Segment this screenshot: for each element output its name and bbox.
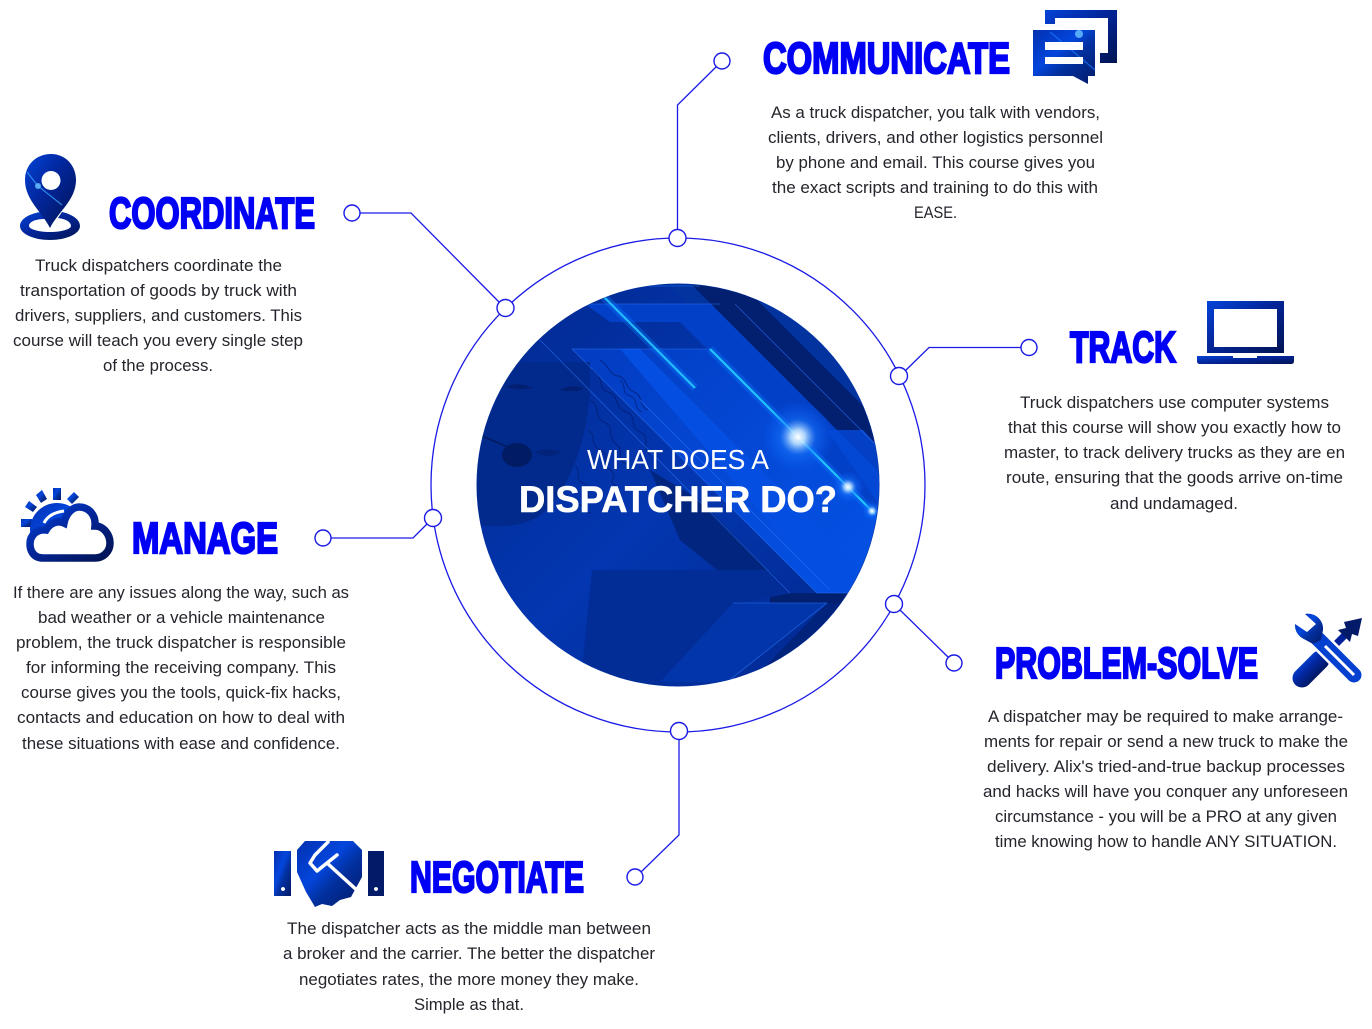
- panel: manage: [13, 488, 349, 753]
- text: manage: [13, 584, 349, 753]
- text: coordinate: drivers, suppliers, and customers. This: [15, 307, 302, 325]
- outer ring: [431, 238, 925, 732]
- icon: laptop: [1197, 301, 1294, 364]
- text: manage: If there are any issues along the way, such as: [13, 584, 349, 602]
- central title: [519, 444, 837, 520]
- text: manage: for informing the receiving company. This: [26, 659, 336, 677]
- text: coordinate: [13, 257, 303, 375]
- text: manage: course gives you the tools, quick-fix hacks,: [21, 684, 341, 702]
- text: negotiate: a broker and the carrier. The better the dispatcher: [283, 945, 656, 963]
- text: negotiate: The dispatcher acts as the middle man between: [287, 920, 651, 938]
- panel: communicate: [763, 10, 1117, 222]
- hair: [565, 360, 650, 513]
- panel: coordinate: [13, 154, 315, 375]
- light streaks: [604, 297, 695, 388]
- connector: problem-solve: [886, 596, 962, 671]
- central circle: what does a dispatcher do: [465, 283, 890, 690]
- heading: track: TRACK: [1070, 323, 1176, 372]
- text: communicate: EASE.: [914, 204, 957, 222]
- text: coordinate: course will teach you every single step: [13, 332, 303, 350]
- text: track: that this course will show you exactly how to: [1008, 419, 1341, 437]
- text: problem-solve: delivery. Alix's tried-and-true backup processes: [987, 758, 1345, 776]
- text: track: [1004, 394, 1345, 513]
- text: manage: bad weather or a vehicle maintenance: [38, 609, 325, 627]
- icon: wrench and screwdriver: [1295, 614, 1362, 678]
- text: communicate: the exact scripts and training to do this with: [772, 179, 1098, 197]
- connector: communicate: [669, 53, 730, 246]
- panel: track: [1004, 301, 1345, 513]
- central title: DISPATCHER DO?: [519, 479, 837, 520]
- connector: negotiate: [627, 722, 688, 885]
- text: problem-solve: time knowing how to handle ANY SITUATION.: [995, 833, 1337, 851]
- central title: WHAT DOES A: [587, 444, 769, 475]
- heading: manage: MANAGE: [132, 514, 278, 563]
- connector: track: [890, 340, 1037, 384]
- text: negotiate: [283, 920, 656, 1014]
- panel: negotiate: [274, 841, 656, 1014]
- text: manage: these situations with ease and confidence.: [22, 735, 340, 753]
- text: track: master, to track delivery trucks as they are en: [1004, 444, 1345, 462]
- panel: problem-solve: [983, 614, 1362, 851]
- headset microphone: [482, 436, 507, 447]
- text: track: and undamaged.: [1110, 495, 1238, 513]
- text: negotiate: negotiates rates, the more money they make.: [299, 971, 639, 989]
- heading: communicate: COMMUNICATE: [763, 34, 1010, 83]
- text: track: Truck dispatchers use computer systems: [1020, 394, 1329, 412]
- text: communicate: As a truck dispatcher, you talk with vendors,: [771, 104, 1100, 122]
- text: coordinate: Truck dispatchers coordinate the: [35, 257, 282, 275]
- icon: handshake: [274, 841, 384, 907]
- heading: problem-solve: PROBLEM-SOLVE: [995, 639, 1258, 688]
- laptop shape: [580, 570, 792, 690]
- thin band lines: [540, 286, 890, 682]
- text: problem-solve: and hacks will have you conquer any unforeseen: [983, 783, 1348, 801]
- connector: manage: [315, 510, 442, 546]
- face silhouette: [465, 362, 590, 526]
- text: manage: problem, the truck dispatcher is responsible: [16, 634, 346, 652]
- text: coordinate: of the process.: [103, 357, 213, 375]
- connector: coordinate: [344, 205, 514, 316]
- text: track: route, ensuring that the goods arrive on-time: [1006, 469, 1343, 487]
- text: communicate: [768, 104, 1103, 222]
- text: communicate: clients, drivers, and other logistics personnel: [768, 129, 1103, 147]
- icon: chat bubbles: [1033, 10, 1117, 84]
- face features: [505, 384, 584, 391]
- icon: sun and cloud: [21, 488, 110, 558]
- heading: negotiate: NEGOTIATE: [410, 853, 584, 902]
- text: problem-solve: ments for repair or send a new truck to make the: [984, 733, 1348, 751]
- text: manage: contacts and education on how to deal with: [17, 709, 345, 727]
- text: problem-solve: [983, 708, 1348, 851]
- text: problem-solve: A dispatcher may be required to make arrange-: [988, 708, 1343, 726]
- text: communicate: by phone and email. This course gives you: [776, 154, 1095, 172]
- text: problem-solve: circumstance - you will be a PRO at any given: [995, 808, 1337, 826]
- text: coordinate: transportation of goods by truck with: [20, 282, 297, 300]
- heading: coordinate: COORDINATE: [109, 189, 315, 238]
- text: negotiate: Simple as that.: [414, 996, 524, 1014]
- icon: map pin: [20, 154, 80, 240]
